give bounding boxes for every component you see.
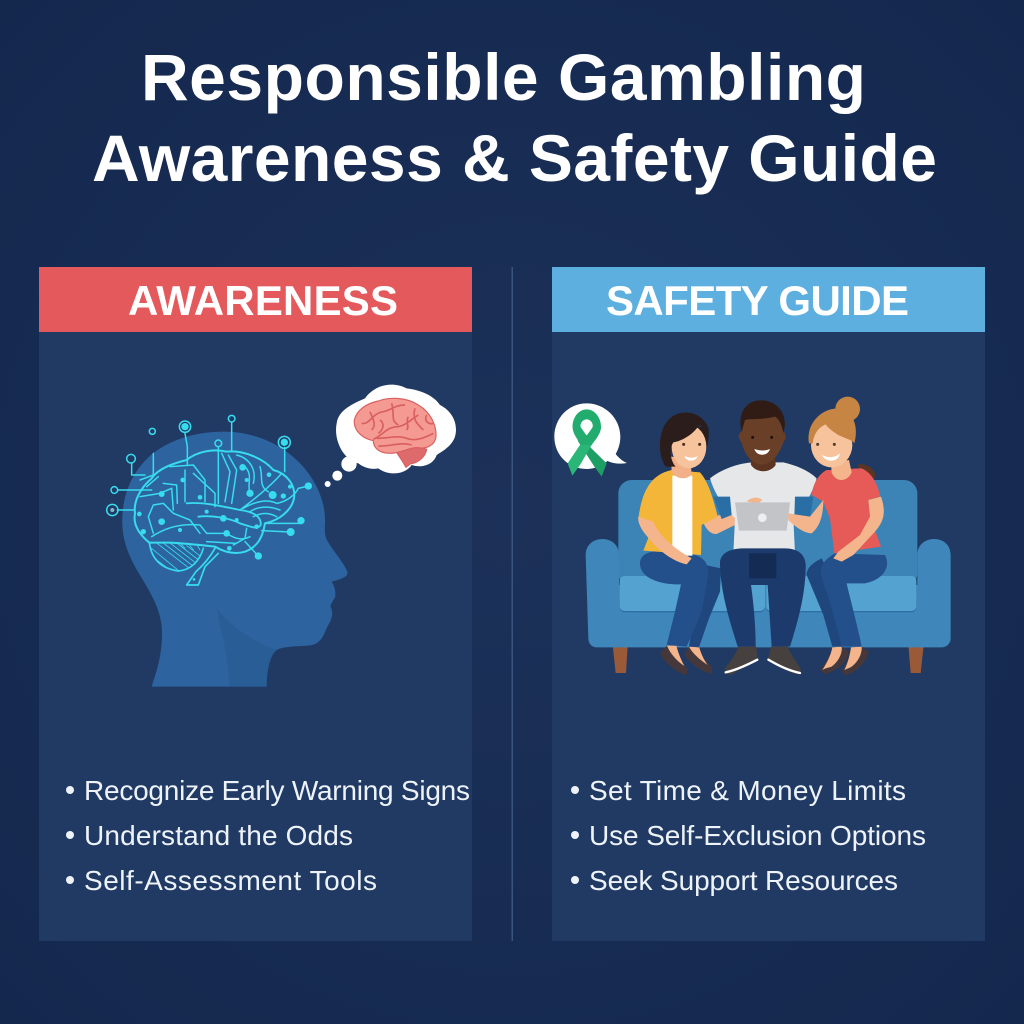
safety bullet list: Seek Support Resources <box>589 865 898 896</box>
heading: awareness <box>39 267 472 332</box>
awareness ribbon <box>568 409 607 477</box>
title <box>92 40 937 195</box>
illustration: head with circuit brain <box>107 385 456 687</box>
panel: awareness <box>39 267 472 941</box>
awareness bullet list: Self-Assessment Tools <box>84 865 377 896</box>
awareness bullet list: Understand the Odds <box>84 820 353 851</box>
illustration: three people on a sofa <box>554 397 951 676</box>
awareness bullet list <box>66 775 470 896</box>
person: man <box>710 400 817 675</box>
title: Responsible Gambling <box>141 40 866 114</box>
circuit brain <box>107 415 308 585</box>
ribbon speech bubble <box>554 403 627 477</box>
safety bullet list <box>571 775 926 896</box>
sofa <box>586 480 951 673</box>
panel: safety guide <box>552 267 985 941</box>
thought bubble <box>325 385 456 487</box>
safety bullet list: Use Self-Exclusion Options <box>589 820 926 851</box>
heading: safety guide <box>552 267 985 332</box>
head silhouette <box>122 432 347 687</box>
heading: awareness: AWARENESS <box>128 277 398 324</box>
pink brain <box>354 398 436 467</box>
awareness bullet list: Recognize Early Warning Signs <box>84 775 470 806</box>
heading: safety guide: SAFETY GUIDE <box>606 277 909 324</box>
title: Awareness & Safety Guide <box>92 121 937 195</box>
laptop <box>735 502 790 531</box>
safety bullet list: Set Time & Money Limits <box>589 775 906 806</box>
person: left woman <box>638 412 737 675</box>
person: right woman <box>788 397 887 676</box>
